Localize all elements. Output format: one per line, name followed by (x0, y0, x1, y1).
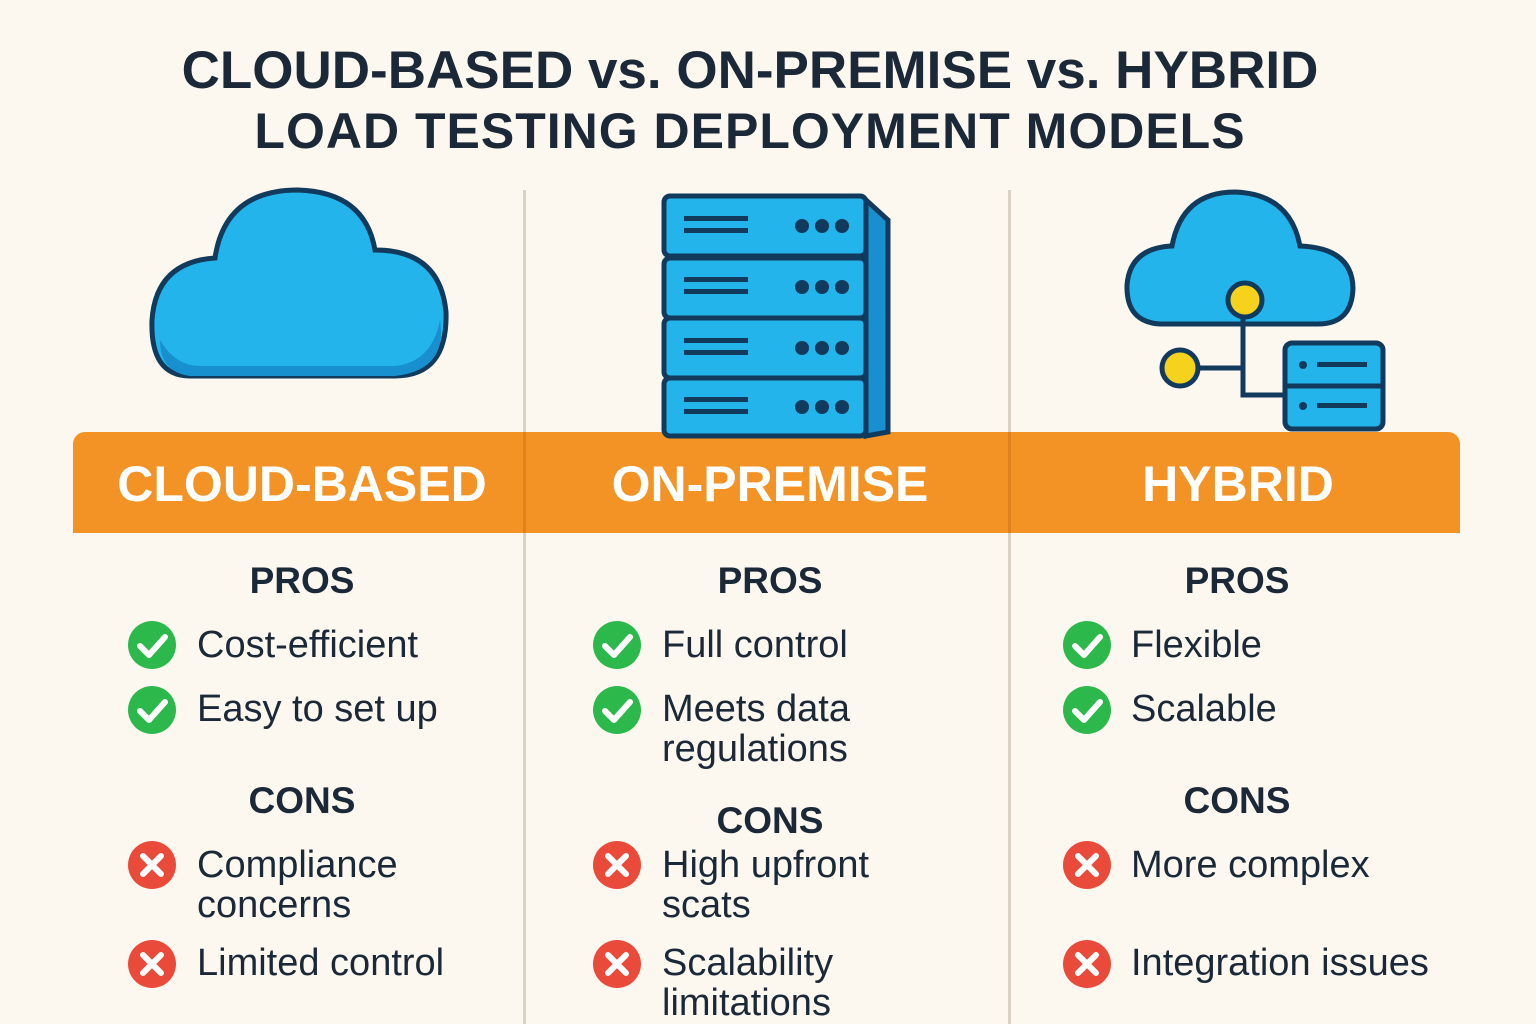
title: LOAD TESTING DEPLOYMENT MODELS (254, 103, 1246, 159)
panel: on-premise: regulations (662, 728, 848, 770)
panel: hybrid: Flexible (1131, 624, 1262, 666)
text: ON-PREMISE (612, 456, 928, 512)
title: CLOUD-BASED vs. ON-PREMISE vs. HYBRID (182, 41, 1318, 100)
title (182, 41, 1318, 159)
panel: on-premise (593, 560, 869, 1024)
text: HYBRID (1142, 456, 1334, 512)
panel: on-premise: Meets data (662, 688, 850, 730)
panel: on-premise: limitations (662, 982, 831, 1024)
panel: cloud-based: Easy to set up (197, 688, 438, 730)
panel: hybrid: Scalable (1131, 688, 1277, 730)
panel: on-premise: PROS (718, 560, 822, 601)
panel: cloud-based: Limited control (197, 942, 444, 984)
panel: hybrid (1063, 560, 1429, 988)
panel: cloud-based: Compliance (197, 844, 398, 886)
panel: cloud-based (128, 560, 444, 988)
panel: cloud-based: PROS (250, 560, 354, 601)
panel: on-premise: Scalability (662, 942, 833, 984)
panel: on-premise: scats (662, 884, 751, 926)
panel: hybrid: CONS (1184, 780, 1290, 821)
panel: hybrid: PROS (1185, 560, 1289, 601)
panel: cloud-based: Cost-efficient (197, 624, 418, 666)
icon: server stack (662, 194, 890, 439)
panel: on-premise: Full control (662, 624, 848, 666)
panel: cloud-based: CONS (249, 780, 355, 821)
icon: cloud (149, 188, 449, 378)
icon: hybrid cloud (1124, 190, 1386, 432)
panel: on-premise: High upfront (662, 844, 869, 886)
panel: hybrid: Integration issues (1131, 942, 1429, 984)
text: CLOUD-BASED (117, 456, 487, 512)
panel: cloud-based: concerns (197, 884, 351, 926)
panel: hybrid: More complex (1131, 844, 1370, 886)
panel: on-premise: CONS (717, 800, 823, 841)
header band (73, 432, 1460, 533)
